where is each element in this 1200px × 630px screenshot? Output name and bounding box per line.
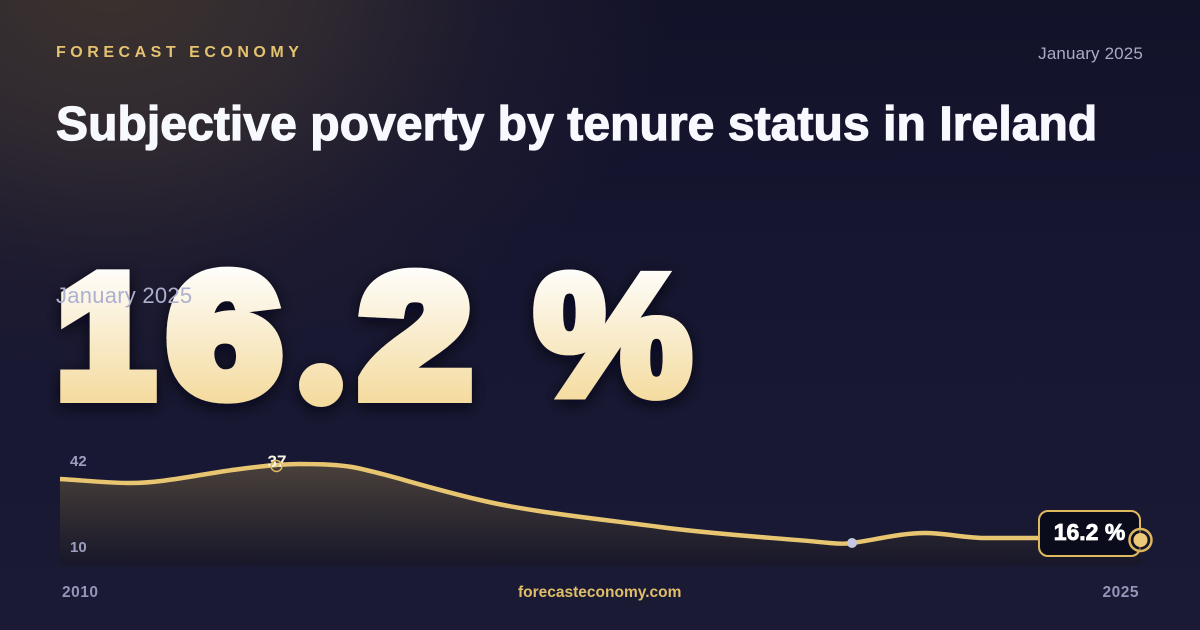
chart area: [60, 464, 1141, 565]
callout: 16.2 %: [1054, 519, 1125, 545]
big value: .: [309, 242, 333, 433]
area fill: [60, 464, 1141, 565]
y axis labels: 10: [70, 539, 87, 556]
x axis end: 2025: [1103, 584, 1139, 601]
date overlay on value: January 2025: [56, 283, 192, 308]
brand label: FORECAST ECONOMY: [56, 44, 303, 61]
date top right: January 2025: [1038, 44, 1143, 63]
end marker: [1130, 529, 1152, 551]
y axis labels: [70, 453, 87, 556]
big value: 6: [168, 240, 280, 431]
big value: %: [534, 240, 692, 431]
source url: forecasteconomy.com: [518, 584, 681, 601]
big value: 2: [360, 241, 470, 432]
trend line: [60, 464, 1141, 544]
min marker: [847, 538, 857, 548]
callout: [1039, 511, 1140, 556]
y axis labels: 42: [70, 453, 87, 470]
x axis start: 2010: [62, 584, 98, 601]
title: Subjective poverty by tenure status in Ireland: [56, 98, 1097, 151]
big value: 1: [58, 241, 154, 432]
max label: 37: [268, 452, 286, 471]
max marker: [271, 460, 282, 472]
